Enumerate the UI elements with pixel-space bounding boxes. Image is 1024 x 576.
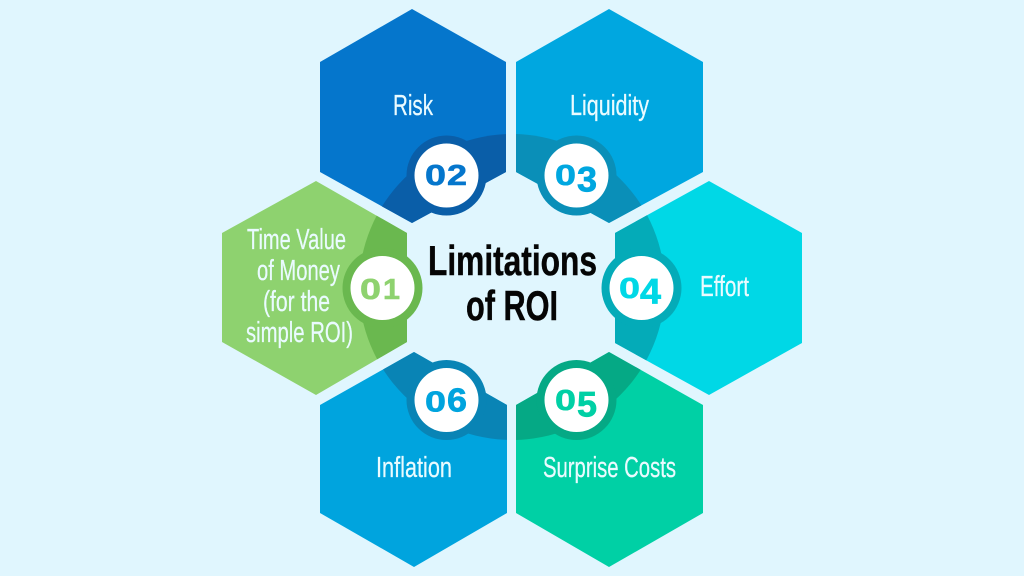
label: Surprise Costs: Surprise Costs — [543, 452, 676, 484]
badge: 06 — [406, 360, 486, 440]
title: Limitations of ROI — [428, 237, 597, 329]
title: Limitations of ROI: Limitations — [428, 237, 597, 284]
label: Time Value of Money (for the simple ROI): (for the — [263, 286, 330, 318]
label: Time Value of Money (for the simple ROI): Time Value — [247, 224, 346, 256]
badge: 04 — [602, 248, 682, 328]
label: Time Value of Money (for the simple ROI): of Money — [257, 255, 340, 287]
badge: 03: 3 — [577, 160, 597, 199]
badge: 06: 0 — [425, 386, 446, 418]
panel: 05 Surprise Costs — [516, 352, 703, 567]
label: Inflation: Inflation — [376, 452, 452, 484]
label: Liquidity: Liquidity — [570, 90, 649, 122]
badge: 05: 0 — [555, 385, 576, 417]
badge: 02: 0 — [425, 160, 446, 192]
badge: 02 — [406, 136, 486, 216]
badge: 05 — [536, 360, 616, 440]
badge: 04: 0 — [619, 273, 640, 305]
badge: 04: 4 — [640, 272, 661, 311]
badge: 05: 5 — [577, 385, 597, 424]
panel: 01 Time Value of Money — [222, 181, 422, 395]
label: Risk: Risk — [393, 90, 433, 122]
badge: 03 — [536, 136, 616, 216]
panel: 06 Inflation — [320, 352, 507, 567]
label: Time Value of Money (for the simple ROI): simple ROI) — [246, 317, 353, 349]
badge: 02: 2 — [447, 160, 467, 192]
badge: 01 — [342, 248, 422, 328]
label: Effort: Effort — [700, 271, 749, 303]
panel: 03 Liquidity — [516, 9, 703, 223]
badge: 03: 0 — [555, 160, 576, 192]
label: Time Value of Money (for the simple ROI) — [246, 224, 353, 349]
panel: 04 Effort — [602, 181, 802, 395]
badge: 01: 1 — [383, 274, 400, 306]
badge: 01: 0 — [360, 274, 381, 306]
panel: 02 Risk — [320, 9, 506, 223]
badge: 06: 6 — [447, 382, 467, 419]
title: Limitations of ROI: of ROI — [466, 282, 558, 329]
